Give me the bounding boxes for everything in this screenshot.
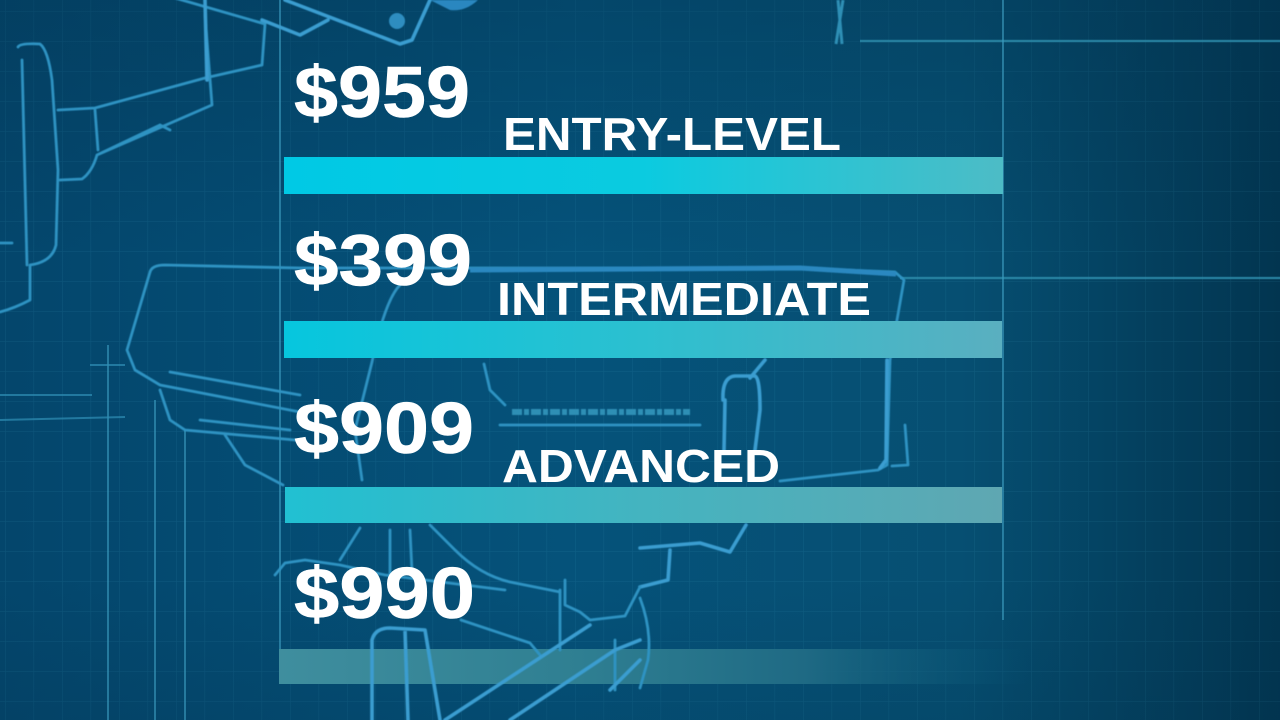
- price: $990: $990: [294, 554, 475, 634]
- price: $399: $399: [294, 221, 472, 301]
- price: $959: $959: [294, 53, 470, 133]
- lower camera bracket: [275, 525, 746, 720]
- label: intermediate: INTERMEDIATE: [497, 273, 871, 325]
- upper wall mount: [0, 0, 265, 312]
- label: advanced: ADVANCED: [502, 440, 780, 492]
- upper camera body: [262, 0, 843, 44]
- tier bar: intermediate: [284, 321, 1002, 358]
- camera sketch line art: [0, 0, 908, 485]
- tier bar: advanced: [285, 487, 1002, 523]
- price: $909: $909: [294, 389, 474, 469]
- tier bar: fourth fading: [279, 649, 1029, 684]
- label: entry-level: ENTRY-LEVEL: [503, 108, 841, 160]
- tier bar: entry-level: [284, 157, 1003, 194]
- middle camera body: [127, 265, 908, 485]
